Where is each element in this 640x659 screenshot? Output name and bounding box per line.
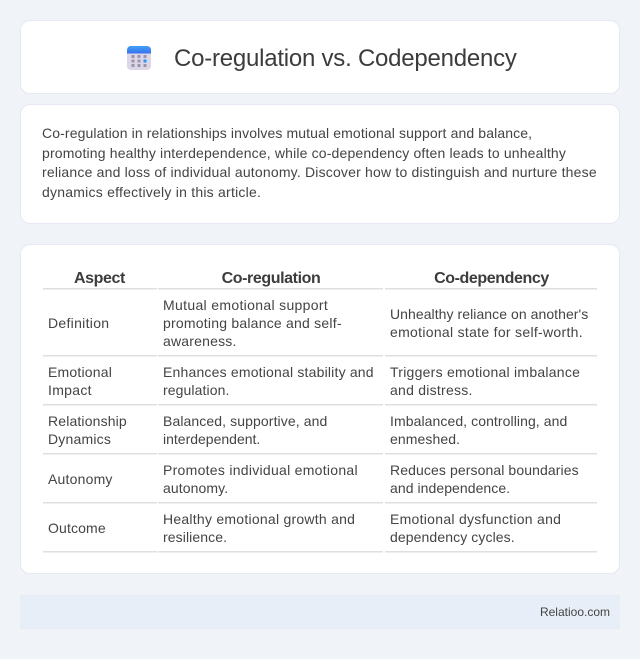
row: Definition: awareness.	[163, 333, 237, 349]
row: Outcome: resilience.	[163, 529, 227, 545]
row: Emotional Impact: Enhances emotional stability and	[163, 364, 374, 380]
row: Relationship Dynamics: Imbalanced, controlling, and	[390, 413, 567, 429]
row: Relationship Dynamics: Relationship	[48, 413, 127, 429]
row: Definition: Definition	[48, 315, 109, 331]
text block: introduction: reliance and loss of individual autonomy. Discover how to distinguish and nurture these	[42, 164, 597, 180]
row: Relationship Dynamics	[43, 413, 597, 455]
row: Autonomy: Promotes individual emotional	[163, 462, 358, 478]
footer text: Relatioo.com	[540, 605, 610, 619]
table header: Co-regulation	[222, 270, 320, 287]
row: Autonomy: Autonomy	[48, 471, 113, 487]
panel: introduction	[20, 104, 620, 224]
table header: Aspect	[74, 270, 125, 287]
row: Relationship Dynamics: Dynamics	[48, 431, 111, 447]
panel: comparison table	[20, 244, 620, 574]
table header: Co-dependency	[434, 270, 549, 287]
title: Co-regulation vs. Codependency	[174, 45, 517, 72]
row: Outcome: Healthy emotional growth and	[163, 511, 355, 527]
row: Relationship Dynamics: Balanced, supportive, and	[163, 413, 327, 429]
row: Autonomy: Reduces personal boundaries	[390, 462, 579, 478]
row: Autonomy	[43, 462, 597, 504]
text block: introduction: dynamics effectively in this article.	[42, 184, 261, 200]
row: Emotional Impact: regulation.	[163, 382, 229, 398]
row: Outcome: Outcome	[48, 520, 106, 536]
row: Autonomy: autonomy.	[163, 480, 228, 496]
panel: title card	[20, 20, 620, 94]
footer bar	[20, 595, 620, 629]
row: Definition: Mutual emotional support	[163, 297, 328, 313]
row: Outcome	[43, 511, 597, 553]
text block: introduction: Co-regulation in relationships involves mutual emotional support and balance,	[42, 125, 532, 141]
table header	[43, 270, 597, 290]
row: Emotional Impact: and distress.	[390, 382, 473, 398]
text block: introduction: promoting healthy interdependence, while co-dependency often leads to unhealthy	[42, 145, 566, 161]
row: Definition: emotional state for self-worth.	[390, 324, 583, 340]
row: Definition	[43, 297, 597, 357]
row: Relationship Dynamics: enmeshed.	[390, 431, 460, 447]
row: Emotional Impact: Emotional	[48, 364, 112, 380]
row: Relationship Dynamics: interdependent.	[163, 431, 260, 447]
row: Emotional Impact: Impact	[48, 382, 92, 398]
text block: introduction	[42, 125, 597, 200]
row: Outcome: dependency cycles.	[390, 529, 515, 545]
row: Definition: promoting balance and self-	[163, 315, 342, 331]
row: Autonomy: and independence.	[390, 480, 510, 496]
row: Definition: Unhealthy reliance on another's	[390, 306, 588, 322]
row: Outcome: Emotional dysfunction and	[390, 511, 561, 527]
icon: calendar	[127, 46, 151, 70]
row: Emotional Impact: Triggers emotional imbalance	[390, 364, 580, 380]
row: Emotional Impact	[43, 364, 597, 406]
